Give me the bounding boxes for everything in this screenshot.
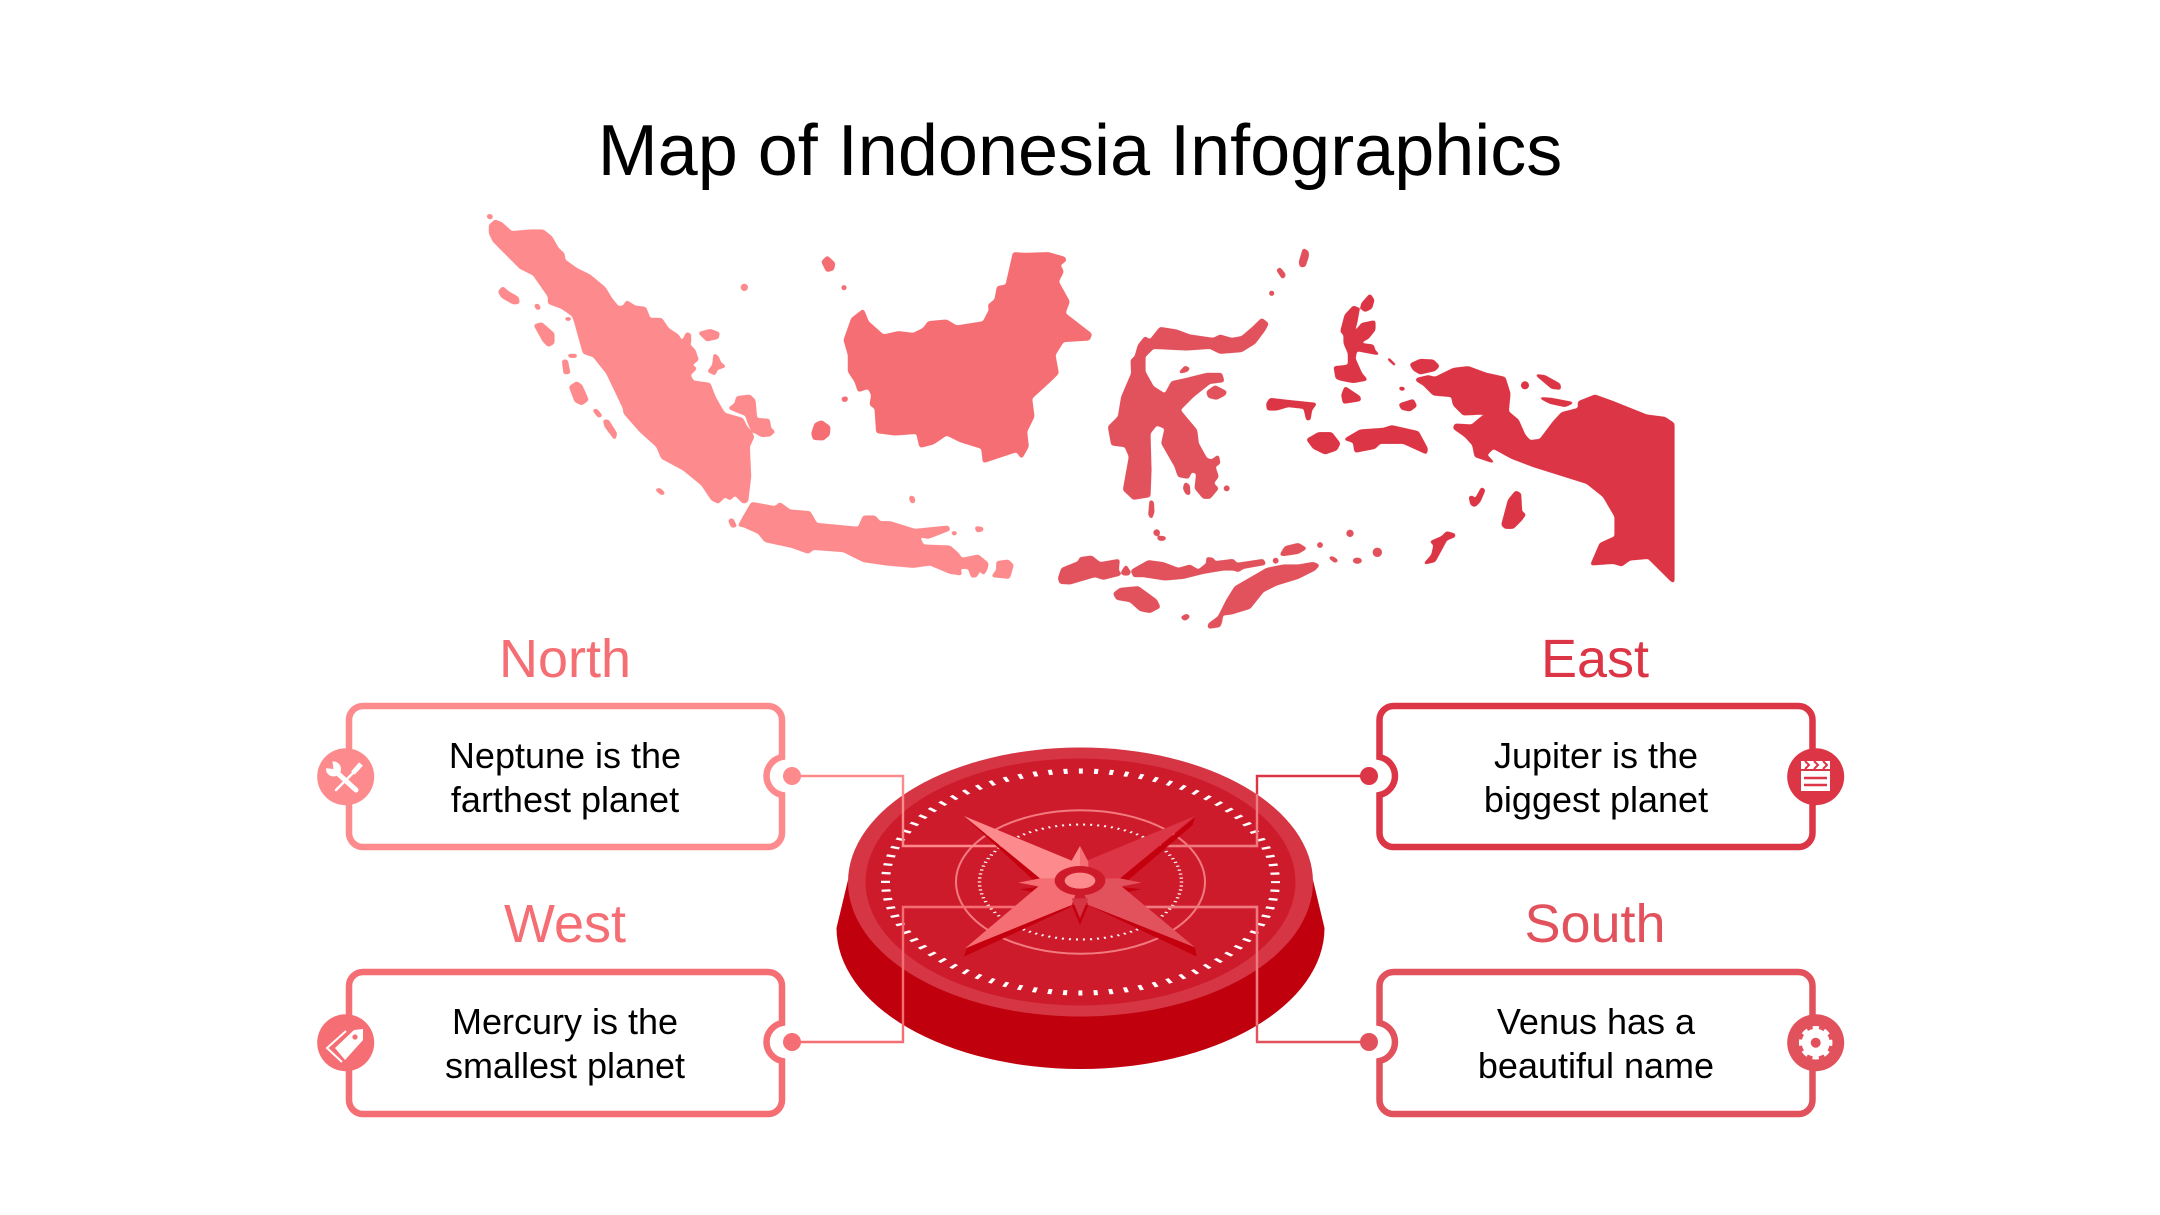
region: Borneo (812, 253, 1092, 463)
connector dot (1360, 767, 1378, 785)
card outline (349, 706, 782, 847)
inner dotted ring (980, 825, 1182, 939)
description: Jupiter is the (1494, 735, 1698, 776)
compass rim (848, 748, 1313, 1016)
panel: East (1360, 629, 1844, 847)
region: Java and Bali (728, 496, 1013, 578)
heading: West: West (504, 894, 626, 954)
connector highlight: east over compass (1160, 794, 1257, 846)
description: Neptune is the (449, 735, 681, 776)
connector dot (783, 1033, 801, 1051)
connector: east (1160, 776, 1369, 846)
connector: west (792, 907, 1017, 1042)
icon: gear (1787, 1014, 1844, 1071)
panel: North (317, 629, 801, 847)
description: beautiful name (1478, 1045, 1714, 1086)
region: Lesser Sunda Islands (1058, 530, 1382, 628)
region: Sumatra (487, 214, 775, 503)
region: Maluku and Papua (1334, 294, 1674, 583)
card outline (349, 972, 782, 1114)
title: Map of Indonesia Infographics (598, 111, 1562, 191)
card outline (1380, 706, 1812, 847)
compass face (866, 758, 1296, 1006)
heading: East: East (1541, 629, 1649, 689)
icon: tools (317, 748, 374, 805)
icon: clapperboard (1787, 748, 1844, 805)
description: Venus has a (1497, 1001, 1696, 1042)
connector lines (792, 776, 1369, 1042)
connector: south (1145, 907, 1369, 1042)
connector: north (792, 776, 1007, 846)
connector highlight: south over compass (1145, 907, 1257, 1025)
region: Sulawesi (1108, 248, 1308, 519)
description: farthest planet (451, 779, 679, 820)
card outline (1380, 972, 1812, 1114)
heading: South: South (1524, 894, 1666, 954)
connector dot (783, 767, 801, 785)
inner ring (956, 810, 1205, 954)
description: Mercury is the (452, 1001, 678, 1042)
compass star (964, 816, 1197, 957)
description: biggest planet (1484, 779, 1708, 820)
compass base (836, 880, 1324, 1069)
outer tick ring (886, 771, 1276, 993)
description: smallest planet (445, 1045, 685, 1086)
map of Indonesia (487, 214, 1674, 628)
panel: South (1360, 894, 1844, 1114)
region: Sula and Buru (1267, 398, 1340, 454)
icon: price tag (317, 1014, 374, 1071)
heading: North: North (499, 629, 631, 689)
connector dot (1360, 1033, 1378, 1051)
panel: West (317, 894, 801, 1114)
compass (836, 748, 1324, 1069)
